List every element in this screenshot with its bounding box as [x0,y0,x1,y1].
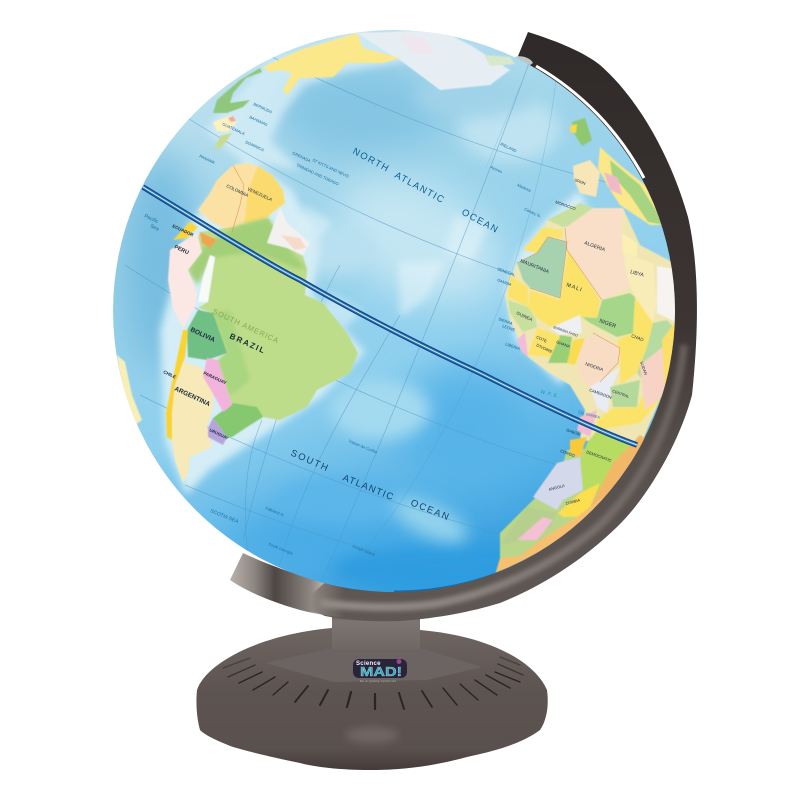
Africa country labels: SIERRA [498,316,514,326]
silver lower-left arc end [230,553,345,618]
Africa country labels: DEMOCRATIC [586,449,612,463]
land: Ghana [548,335,572,363]
land: French Guiana [281,235,306,250]
Africa country labels: MALI [565,282,583,294]
Caribbean and ocean small labels: Sea [149,223,160,233]
north ocean labels [351,146,501,236]
Caribbean and ocean small labels: GUATEMALA [222,121,246,136]
Africa country labels: LIBERIA [505,341,521,351]
dark upper and right arc [300,32,697,621]
South America country labels: ECUADOR [172,223,195,238]
shallow shelf halos around land [160,30,600,495]
south ocean labels [289,448,452,523]
land: Horn of Africa [662,315,680,395]
land: Ethiopia [640,345,672,410]
land: Chile [166,330,188,440]
green rim right edge [600,118,672,265]
white cloud streaks on ocean [300,205,490,328]
land: South Africa [517,517,553,540]
Africa country labels: CENTRAL [612,389,630,399]
land: Zambia [558,483,600,517]
land: Western Sahara [523,227,563,253]
Africa country labels: W.F.E. [539,389,561,400]
land: Nicaragua [214,133,232,150]
Africa country labels: MOROCCO [555,199,576,211]
land: South Africa coast [495,480,630,575]
land: Niger [582,293,635,337]
land: central Europe [610,160,665,225]
land: Gabon [577,410,597,437]
graticule lines [125,57,606,585]
Caribbean and ocean small labels: ST KITTS AND NEVIS [312,157,350,179]
Caribbean and ocean small labels: Falkland Is. [265,505,285,518]
land: white strip [198,255,215,302]
Caribbean and ocean small labels: GRENADA [292,150,312,163]
Science Mad logo: be a young scientist [360,679,396,683]
South America country labels: COLOMBIA [226,183,249,198]
Africa country labels: LEONE [502,323,516,333]
land: Egypt [657,266,682,325]
land: Morocco [547,203,593,227]
base vents [223,657,523,709]
north ocean labels: NORTH [351,146,392,175]
land: Chad [617,297,653,385]
South America country labels: VENEZUELA [247,186,273,202]
north ocean labels: ATLANTIC [393,170,447,206]
land: Guianas [267,207,310,255]
land: Sudan [637,320,680,380]
Africa country labels: SUDAN [639,361,649,376]
land: Cote d'Ivoire [528,328,560,357]
Africa country labels: ZAMBIA [565,497,581,506]
Africa country labels: ALGERIA [583,240,606,254]
Caribbean and ocean small labels: South Georgia [268,541,294,556]
base dome [196,628,548,770]
Africa country labels: GABON [566,427,581,437]
Caribbean and ocean small labels: Tristan da Cunha [348,438,379,455]
South America country labels: PERU [173,244,190,256]
South America country labels: BOLIVIA [189,326,216,344]
Africa country labels: GUINEA [516,310,533,322]
land: Algeria [565,208,630,300]
Africa country labels: ANGOLA [548,483,566,492]
Africa country labels: GAMBIA [497,278,512,287]
Africa country labels [497,177,649,506]
land: Uruguay [208,418,227,445]
South America country labels: ARGENTINA [173,385,211,408]
land: Libya [623,253,657,323]
Science Mad logo [353,659,407,683]
Africa country labels: CONGO [560,448,576,458]
Africa country labels: BURKINA FASO [553,325,578,338]
land: UK and Ireland [572,118,592,146]
land: Nigeria [578,333,620,387]
land: Burkina Faso [550,315,582,335]
land: Togo Benin [567,338,585,365]
meridian stand arc [230,32,697,621]
Africa country labels: SPAIN [574,177,586,186]
light grey collar at axis top [515,56,533,68]
Caribbean and ocean small labels: PANAMA [199,153,216,165]
land: Amazon basin [188,218,307,285]
land: orange border region [200,232,217,248]
Science Mad logo: MAD! [360,664,402,679]
land masses [117,30,690,590]
Caribbean and ocean small labels: Gough Island [352,543,376,557]
land: Bolivia [187,310,227,360]
globe stand base [196,612,548,770]
Caribbean and ocean small labels: BERMUDA [253,101,273,114]
south ocean labels: SOUTH [289,448,331,475]
Caribbean and ocean small labels: SCOTIA SEA [209,508,240,525]
land: left edge Pacific island sliver [117,355,142,425]
land: Honduras [228,116,236,122]
south ocean labels: ATLANTIC [341,473,396,503]
ocean tone patches [120,58,570,596]
Science Mad logo: Science [356,661,381,667]
Africa country labels: MAURITANIA [519,258,550,276]
equator line [143,187,637,445]
land: Mali [528,250,600,328]
blue rim bottom edge [394,452,640,592]
land: Brazil [188,218,358,437]
base neck [332,612,420,649]
land: Colombia [198,163,258,232]
land: Paraguay [203,358,232,412]
Africa country labels: NIGERIA [585,361,604,372]
land: western Europe [598,147,665,225]
land: Venezuela [244,166,285,225]
land: Argentina [172,362,213,483]
Caribbean and ocean small labels: Canary Is. [524,206,542,219]
land: Africa base north [505,208,682,447]
land: Ecuador [173,222,198,240]
land: France [604,172,622,195]
land: DR Congo [580,427,637,493]
Caribbean and ocean small labels: EQ. GUINEA [578,410,601,420]
South America country labels: SOUTH AMERICA [211,307,281,345]
Africa country labels: NIGER [598,318,617,330]
land: pale far north [357,30,510,90]
land: Namibia Botswana [500,507,557,545]
Africa country labels: LIBYA [629,269,645,279]
Africa country labels: SENEGAL [497,266,517,278]
South America country labels [163,183,281,441]
land: Central African Republic [610,380,640,407]
land: Ireland [570,124,577,133]
land: Cameroon [590,367,620,413]
South America country labels: CHILE [163,369,177,380]
land: Mexico [213,68,262,113]
Africa country labels: COTE [536,334,548,344]
land: Liberia [517,332,528,357]
land: Guinea [508,300,537,332]
South America country labels: URUGUAY [209,427,230,441]
Africa country labels: CHAD [631,333,645,343]
south ocean labels: OCEAN [409,498,452,523]
land: East Africa yellow band [597,367,667,430]
land: Spain [573,160,600,197]
South America country labels: BRAZIL [228,332,267,356]
land: western Brazil [213,310,250,395]
land: Tunisia [622,233,637,257]
land: East coast orange [590,435,655,510]
Caribbean and ocean small labels: DOMINICA [245,139,265,152]
top plate of base [265,648,482,682]
Africa country labels: D'IVOIRE [536,342,554,354]
land: United States [263,33,400,95]
land: Central America [213,115,237,132]
arc light band near globe [320,345,684,607]
land: Angola [533,457,583,510]
land: pale pink north [402,36,432,54]
Caribbean and ocean small labels [143,101,601,557]
Caribbean and ocean small labels: Azores [490,164,503,174]
Caribbean and ocean small labels: Pacific [143,213,159,225]
country borders accent [232,165,620,382]
Caribbean and ocean small labels: TRINIDAD AND TOBAGO [296,162,340,186]
highlight on base [346,727,398,743]
land: Africa base south [500,445,690,590]
land: Peru [168,233,202,328]
land: southern Brazil [213,403,263,437]
South America country labels: PARAGUAY [203,370,227,385]
north ocean labels: OCEAN [460,207,501,236]
Africa country labels: GHANA [556,339,571,349]
Africa country labels: CAMEROON [589,387,613,400]
illustrated globe on stand [113,30,697,770]
Caribbean and ocean small labels: Madeira [517,182,532,193]
Caribbean and ocean small labels: BAHAMAS [249,114,269,127]
land: Senegal [508,275,528,307]
globe sphere [113,30,690,596]
land: Congo [570,437,587,457]
land: pale green north [484,55,515,66]
white gap between arc and globe [536,66,644,178]
land: Mauritania [517,237,567,298]
ocean base [113,30,675,592]
Caribbean and ocean small labels: IRELAND [500,141,518,153]
